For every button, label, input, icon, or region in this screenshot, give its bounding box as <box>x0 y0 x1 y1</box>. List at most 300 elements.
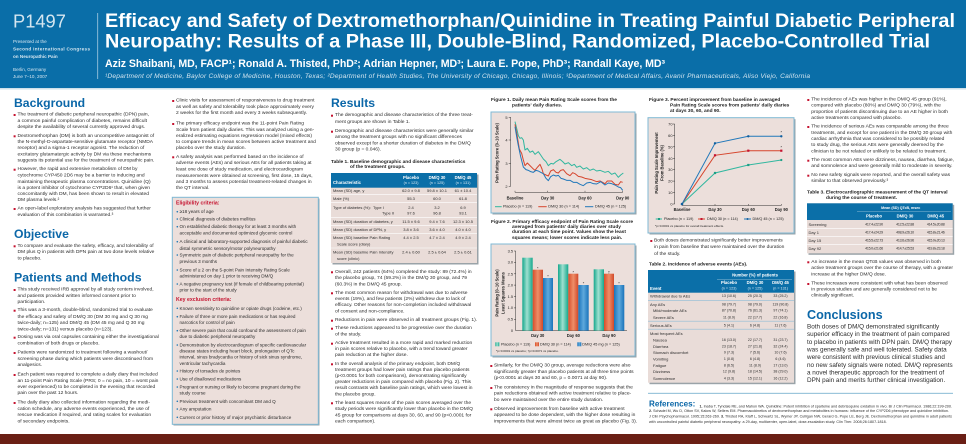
figure 1: line chart of daily pain scores: Pain Rating Score (0–10 Scale) <box>494 122 500 183</box>
table 2: adverse events: Vomiting <box>653 356 668 362</box>
table 2: adverse events: 87 (70.8) <box>722 309 736 313</box>
table 3: QTcB interval: 413.6 ± 26.96 <box>896 239 914 243</box>
table 1: baseline characteristics: score (clinic) <box>337 256 360 261</box>
table 2: adverse events: 11 (8.9) <box>749 363 761 367</box>
text block: objective: to placebo. <box>18 256 42 262</box>
table 1: baseline characteristics: 4.9 ± 2.4 <box>455 235 472 240</box>
reference list: J Clin Psychopharmacol. 1995;15:263-269. 3. Thisted RA, Klaff L, Schwartz SL, Wymer JP, Culligan NW, Gerard G, Pope LE, Berg JE. Dextromethorphan and quinidine in adult patients <box>649 414 952 418</box>
figure 2: bar chart of least squares means: Day 30 <box>531 333 545 338</box>
table 2: adverse events: (n = 131) <box>773 286 788 290</box>
figure 2: bar chart of least squares means: 0 <box>511 328 514 333</box>
table 1: baseline characteristics: 11.5 ± 9.6 <box>402 219 421 224</box>
text block: results intro: among the treatment groups with no significant differences <box>335 134 463 140</box>
figure 1: line chart of daily pain scores: Baseline <box>507 196 524 200</box>
footer bar <box>0 434 966 444</box>
table 2 title: Table 2. Incidence of adverse events (AEs). <box>649 262 747 268</box>
bars: day 90: † <box>608 269 610 274</box>
figure 3: line chart of percent improvement <box>648 118 796 234</box>
table 1: baseline characteristics: 4.0 ± 4.0 <box>455 227 472 232</box>
figure 1 title: patients' daily diaries. <box>512 102 562 108</box>
table 2: adverse events: Event <box>650 286 662 291</box>
table 1: baseline characteristics: 6.9 <box>460 205 467 210</box>
figure 3 title: Pain Rating Scale scores from patients' daily diaries <box>670 102 790 108</box>
legend: DM/Q 30 (n = 114) <box>548 205 580 209</box>
table 2: adverse events: 22 (16.8) <box>773 315 788 319</box>
figure 3 title <box>649 97 790 114</box>
figure 2: bar chart of least squares means: 3.0 <box>508 260 514 264</box>
table 1 title: Table 1. Baseline demographic and disease characteristics <box>331 159 466 165</box>
list: exclusion criteria: Any amputation <box>180 406 212 412</box>
table 1: baseline characteristics: 97.6 <box>407 210 416 216</box>
text block: results findings: Active treatment resulted in a more rapid and marked reduction <box>335 340 472 346</box>
legend: DM/Q 45 (n = 125) <box>595 205 627 209</box>
text block: methods continued: as well as safety and tolerability took place approximately every <box>176 104 315 110</box>
text block: results intro <box>331 112 474 152</box>
figure 3: line chart of percent improvement: 70 <box>668 122 673 126</box>
table 2: adverse events: 25 (20.3) <box>748 294 762 298</box>
text block: safety findings: to study drug, the serious AEs were generally deemed by the <box>811 142 944 148</box>
figure 2 title: averaged from patients' daily diaries over study <box>512 224 621 230</box>
text block: objective: To compare and evaluate the safety, efficacy, and tolerability of <box>18 243 154 249</box>
list: eligibility criteria <box>176 209 308 292</box>
heading: References: References: <box>649 399 695 408</box>
congress details <box>13 39 90 79</box>
footnote: *p<0.0001 vs placebo for overall treatment effects. <box>655 224 724 228</box>
figure 2: bar chart of least squares means <box>491 244 636 358</box>
text block: conclusions: was generally safe and well tolerated. Safety data <box>806 346 947 354</box>
list: exclusion criteria: study course <box>180 390 206 396</box>
figure 2: bar chart of least squares means: Least Squares Means <box>500 271 506 314</box>
text block: background bullets: However, the rapid and extensive metabolism of DM by <box>18 166 138 172</box>
table 1: baseline characteristics: 55.3 <box>407 196 416 201</box>
table 3: QTcB interval: 417.4 ± 24.29 <box>865 231 883 235</box>
text block: patients and methods bullets: combination of both drugs or placebo. <box>18 340 100 346</box>
table 2: adverse events: 9 (7.3) <box>724 351 734 355</box>
text block: patients and methods bullets: rescue medication if required, and rating scales for evaluation <box>18 412 151 418</box>
text block: methods continued: Scale from patient daily diaries. This was analyzed using a gen- <box>176 127 315 133</box>
table 3: QTcB interval: Day 92 <box>808 246 822 251</box>
text block: safety findings: active treatments compared with placebo. <box>811 115 902 121</box>
table 3: QTcB interval: 414.7 ± 25.53 <box>896 247 914 251</box>
table 3 title: during the course of treatment. <box>826 195 897 201</box>
bars: day 60: * <box>583 280 585 286</box>
figure 3: line chart of percent improvement: 50 <box>668 144 673 150</box>
legend: DM/Q 45 mg (n = 125) <box>582 342 620 346</box>
figure 1: line chart of daily pain scores: Day 30 <box>541 196 555 200</box>
table 3: QTcB interval: 414.5 ± 20.88 <box>927 222 945 226</box>
table 2: adverse events: Somnolence <box>653 376 676 381</box>
table 2: adverse events: Dizziness <box>653 369 670 374</box>
figure 3: line chart of percent improvement: Baseline <box>674 207 691 212</box>
text block: figure 2 findings: improvements that were almost twice as great as placebo (Fig. 3). <box>494 418 637 424</box>
poster number: P1497 <box>13 10 66 32</box>
text block: results intro: observed except for a shorter duration of diabetes in the DM/Q <box>335 140 471 146</box>
table 1: baseline characteristics: 3.2 <box>434 205 441 210</box>
figure 2: bar chart of least squares means: 0.5 <box>508 316 513 322</box>
text block: conclusions: to placebo in patients with DPN pain. DM/Q therapy <box>807 339 953 346</box>
table 2: adverse events: 22 (17.7) <box>748 315 762 319</box>
text block: results findings: pain reduction at the higher dose. <box>335 352 408 358</box>
text block: safety findings: and somnolence and were generally mild to moderate in severity. <box>811 163 952 169</box>
list: exclusion criteria: ventricular tachycardia <box>180 361 226 366</box>
list: exclusion criteria: Previous treatment with concomitant DM and Q <box>180 399 276 404</box>
legend <box>656 217 784 221</box>
text block: patients and methods bullets: an 11-point Pain Rating Scale (PRS; 0 = no pain, 10 = worst pain <box>18 378 159 384</box>
figure 1: line chart of daily pain scores <box>491 112 636 214</box>
table 3 title: Table 3. Electrocardiographic measurement of the QT interval <box>807 190 948 196</box>
text block: results intro: The demographic and disease characteristics of the three treat- <box>335 112 473 118</box>
list: exclusion criteria: interval, sinus bradycardia or history of sick sinus syndrome, <box>180 354 302 360</box>
text block: results findings <box>331 269 477 424</box>
table 1 title: of the treatment groups. <box>350 164 405 170</box>
figure 2: bar chart of least squares means: 3.5 <box>508 248 513 254</box>
list: exclusion criteria: History of torsades de pointes <box>180 368 241 374</box>
text block: background bullets: is a potent inhibitor of cytochrome CYP2D6¹ that, when given <box>18 185 150 191</box>
figure 1: line chart of daily pain scores: 5 <box>505 115 508 120</box>
table 1: baseline characteristics: Mean (SD) duration of diabetes, y <box>333 219 393 224</box>
text block: methods continued: adverse events (AEs) and serious AEs for all patients taking at <box>176 160 312 166</box>
text block: safety findings: The incidence of serious AEs was comparable among the three <box>811 124 949 130</box>
bars: day 30 <box>522 258 553 331</box>
heading: Objective: Objective <box>14 227 69 241</box>
table 1: baseline characteristics: 4.4 ± 2.5 <box>403 235 420 240</box>
text block: patients and methods bullets: cation schedule, any adverse events experienced, the use of <box>18 406 150 412</box>
text block: patients and methods bullets: twice-daily; n=125) and DM/Q 45 (DM 45 mg and Q 30 mg <box>18 320 145 326</box>
text block: background bullets: DM plasma levels.² <box>18 197 60 203</box>
legend: DM/Q 30 (n = 114) <box>707 217 739 221</box>
table 1: baseline characteristics <box>331 173 478 264</box>
table 1 title <box>331 159 466 170</box>
congress details: on Neuropathic Pain <box>13 54 58 59</box>
figure 3 title: Figure 3. Percent improvement from baseline in averaged <box>649 97 780 103</box>
figure 1 title: Figure 1. Daily mean Pain Rating Scale scores from the <box>491 97 617 103</box>
congress details: Berlin, Germany <box>13 67 47 72</box>
text block: results findings: in pain scores relative to placebo, with a trend toward greater <box>335 346 468 352</box>
text block: figure 3 findings: of the study. <box>654 251 680 257</box>
text block: figure 2 findings: pain reductions obtained with active treatment relative to place- <box>494 390 632 396</box>
table 1: baseline characteristics: 2.4 <box>408 205 415 210</box>
table 1: baseline characteristics: Placebo <box>403 175 419 180</box>
figure 3: line chart of percent improvement: Day 60 <box>742 207 756 212</box>
text block: background bullets: suggests its potential use for the treatment of neuropathic pain. <box>18 158 154 164</box>
figure 2: bar chart of least squares means: Pain Rating (0–10 Scale) <box>494 269 500 317</box>
reference list: 1. Inaba T, Tyndale RE, and Mahon WA. Quinidine: Potent inhibition of sparteine and debrisoquine oxidation in vivo. Br J Clin Pharmacol. 1986;22:199-200. <box>700 404 952 408</box>
table 1: baseline characteristics: 3.6 ± 4.0 <box>429 227 446 232</box>
text block: patients and methods bullets: the efficacy and safety of DM/Q 30 (DM 30 mg and Q 30 mg <box>18 314 148 320</box>
figure 2: bar chart of least squares means: 2.5 <box>508 272 513 276</box>
table 2: adverse events: Stomach discomfort <box>653 350 689 355</box>
text block: background bullets: the N-methyl-D-aspartate-sensitive glutamate receptor (NMDA <box>18 139 154 145</box>
list: exclusion criteria: due to diabetic peripheral neuropathy <box>180 334 256 339</box>
heading: Results: Results <box>331 96 375 110</box>
text block: QT findings: An increase in the mean QTcB values was observed in both <box>811 259 941 265</box>
text block: background bullets: Dextromethorphan (DM) is both an uncompetitive antagonist of <box>18 133 155 139</box>
text block: patients and methods bullets: This study received IRB approval by all study centers involved, <box>18 286 154 292</box>
table 3: QTcB interval: Placebo <box>866 214 882 218</box>
text block: safety findings <box>807 96 954 184</box>
text block: figure 3 findings: in pain from baseline that were maintained over the duration <box>654 244 785 250</box>
text block: results findings: each comparison). <box>335 418 375 424</box>
table 1: baseline characteristics: Mean (SD) baseline Pain Intensity <box>333 250 393 254</box>
table 1: baseline characteristics: 2.5 ± 0.64 <box>428 250 447 254</box>
footnote: *p<0.0001 vs placebo; †p=0.0071 vs placebo. <box>496 349 559 353</box>
text block: results findings: (60.3%) in the DM/Q 45 group. <box>335 282 402 288</box>
text block: results findings: These reductions appeared to be progressive over the duration <box>335 325 472 331</box>
table 2: adverse events: 16 (12.2) <box>773 376 788 380</box>
table 2: adverse events: 6 (4.8) <box>750 357 760 361</box>
text block: methods continued: to compare trends in mean scores between active treatment and <box>176 139 316 145</box>
text block: safety findings: clinician to be not related or unlikely to be related to treatment. <box>811 148 947 154</box>
table 2: adverse events: DM/Q 45 <box>772 280 790 285</box>
table 2: adverse events: 12 (9.8) <box>723 370 735 374</box>
table 2: adverse events: 16 (13.0) <box>722 338 736 342</box>
text block: QT findings: These increases were consistent with what has been observed <box>811 280 948 286</box>
text block: safety findings: compared with placebo (80%) and DM/Q 30 (79%), with the <box>811 102 941 108</box>
line: placebo <box>682 159 782 204</box>
reference list: 2. Schadel M, Wu D, Otton SV, Kalow W, Sellers EM. Pharmacokinetics of dextromethorphan and metabolites in humans: influence of the CYP2D6 phenotype and quinidine inhibition. <box>649 409 949 413</box>
figure 2: bar chart of least squares means: Day 60 <box>567 333 581 338</box>
table 2: adverse events: 33 (25.2) <box>773 294 788 298</box>
text block: methods continued: and 3 months to assess potential treatment-related changes in <box>176 179 312 185</box>
text block: safety findings: treatments, and except for one patient in the DM/Q 30 group with <box>811 130 953 136</box>
list: exclusion criteria: Failure of three or more pain medications or has required <box>180 314 296 319</box>
reference list: with uncontrolled painful diabetic peripheral neuropathy: a 29-day, multicenter, open-label, dose-escalation study. Clin Ther. 2008;26:1807-1818. <box>649 420 887 424</box>
table 1: baseline characteristics: Scale score (diary) <box>337 242 371 246</box>
figure 1: line chart of daily pain scores: 2 <box>505 184 508 189</box>
figure 2: bar chart of least squares means: 1.0 <box>508 305 514 310</box>
text block: QT findings <box>807 259 953 298</box>
text block: objective <box>14 243 155 262</box>
table 2: adverse events: Most frequent AEs <box>650 331 683 336</box>
table 1: baseline characteristics: 93.1 <box>459 210 468 216</box>
table 2: adverse events: Number (%) of patients <box>732 273 779 278</box>
legend: Placebo (n = 119) <box>503 205 533 209</box>
text block: figure 2 findings: appeared to be dose dependent, with the higher dose resulting in <box>494 412 636 418</box>
figure 1: line chart of daily pain scores: 3 <box>505 161 508 166</box>
line: DM/Q 45 <box>515 127 623 190</box>
table 3: QTcB interval: 415.8 ± 21.46 <box>927 231 945 235</box>
table 1: baseline characteristics: 96.8 <box>433 210 442 216</box>
text block: results findings: the placebo group, 74 (59.2%) in the DM/Q 30 group, and 79 <box>335 275 467 281</box>
table 2: adverse events: Fatigue <box>653 363 667 368</box>
table 3: QTcB interval: Day 1 <box>808 230 820 235</box>
text block: figure 2 findings: Similarly, for the DM/Q 30 group, average reductions were also <box>494 362 631 368</box>
table 2: adverse events: 6 (4.6) <box>775 357 786 361</box>
figure 3: line chart of percent improvement: From Baseline (%) <box>660 145 664 181</box>
text block: conclusions <box>806 324 953 384</box>
text block: background bullets: excitatory glutamatergic activity by DM via these mechanisms <box>18 152 152 158</box>
text block: patients and methods bullets: screening phase during which patients were discontinued from <box>18 356 153 362</box>
legend: Placebo (n = 119) <box>501 342 531 346</box>
figure 2: bar chart of least squares means: 2.0 <box>508 282 514 288</box>
text block: patients and methods bullets: twice-daily; n=131) versus placebo (n=123). <box>18 326 113 332</box>
table 2: adverse events: 11 (8.9) <box>723 315 735 319</box>
heading: Background: Background <box>14 96 85 110</box>
table 1: baseline characteristics: (n = 131) <box>456 181 470 185</box>
list: eligibility criteria: ≥18 years of age <box>180 209 214 214</box>
table 3: QTcB interval: 415.9 ± 20.13 <box>927 239 945 243</box>
reference list <box>649 404 952 424</box>
text block: figure 2 findings <box>490 362 637 424</box>
table 1: baseline characteristics: 2.4 ± 0.60 <box>402 250 421 254</box>
text block: conclusions: a novel therapeutic approach for the treatment of <box>807 370 944 376</box>
table 1: baseline characteristics: Characteristic <box>333 180 362 185</box>
legend: Placebo (n = 119) <box>664 217 694 221</box>
figure 3: line chart of percent improvement: Day 30 <box>708 207 722 212</box>
text block: QT findings: active treatment groups over the course of therapy, with a greater <box>811 265 953 271</box>
text block: results intro: ment groups are shown in Table 1. <box>335 119 410 125</box>
table 1: baseline characteristics: Mean (SD) age, y <box>333 188 364 193</box>
list: eligibility criteria: A clinical and laboratory-supported diagnosis of painful diabetic <box>180 239 308 244</box>
table 2: adverse events: 7 (5.6) <box>750 351 760 355</box>
authors: Aziz Shaibani, MD, FACP¹; Ronald A. Thisted, PhD²; Adrian Hepner, MD³; Laura E. Pope, PhD³; Randall Kaye, MD³ <box>105 58 665 70</box>
text block: safety findings: proportion of patients discontinuing due to an AE higher in both <box>811 109 948 115</box>
text block: conclusions: DPN pain and merits further clinical investigation. <box>807 377 945 384</box>
text block: methods continued: the QT interval. <box>176 185 209 191</box>
text block: figure 2 findings: bo were maintained over the entire study duration. <box>494 397 603 403</box>
figure 3: line chart of percent improvement: 40 <box>668 156 673 161</box>
text block: figure 2 findings: The consistency in the magnitude of response suggests that the <box>494 384 633 390</box>
heading: key exclusion criteria: Key exclusion criteria: <box>176 297 232 303</box>
table 2: adverse events: 97 (74.1) <box>773 309 788 313</box>
figure 3 title: at days 30, 60, and 90. <box>670 108 721 114</box>
list: eligibility criteria: administered on day 1 prior to receiving DM/Q <box>180 274 274 278</box>
text block: results intro: 30 group (p = 0.046). <box>335 146 381 152</box>
list: exclusion criteria <box>176 306 307 420</box>
text block: patients and methods bullets: and patients provided written informed consent prior to <box>18 293 136 299</box>
text block: patients and methods bullets: The daily diary also collected information regarding the medi- <box>18 400 150 406</box>
text block: methods continued: eralized estimating equations regression model (mixed effects) <box>176 133 312 139</box>
table 3: QTcB interval: 419.8 ± 23.18 <box>927 247 945 251</box>
table 1: baseline characteristics: Type of diabetes (%): Type I <box>333 205 384 210</box>
table 2: adverse events: Diarrhea <box>653 344 669 349</box>
table 2: adverse events: (n = 123) <box>722 286 736 290</box>
table 2: adverse events: 13 (10.6) <box>722 294 736 298</box>
table 3: QTcB interval: Screening <box>808 222 827 227</box>
list: eligibility criteria: Clinical diagnosis of diabetes mellitus <box>180 216 256 222</box>
legend <box>495 205 627 209</box>
text block: results findings: of the study. <box>335 332 361 338</box>
text block: results findings: Overall, 242 patients (64%) completed the study: 89 (72.4%) in <box>335 269 472 275</box>
table 2: adverse events: 76 (61.3) <box>748 309 762 313</box>
figure 1 title <box>491 97 617 108</box>
list: eligibility criteria: acceptable and documented optimized glycemic control <box>180 230 292 236</box>
text block: methods continued: placebo over the study duration. <box>176 145 246 151</box>
text block: results findings: study periods were significantly lower than placebo in the DM/Q <box>335 406 473 412</box>
text block: patients and methods bullets: Each patient was required to complete a daily diary that included <box>18 372 158 378</box>
text block: patients and methods bullets <box>14 286 159 424</box>
table 2: adverse events: 23 (18.7) <box>722 344 736 348</box>
text block: results findings: result contrasts with baseline pain ratings, which were lowest in <box>335 385 473 391</box>
title <box>105 10 955 52</box>
text block: results findings: efficacy. Other reasons for non-completion included withdrawal <box>335 302 471 308</box>
list: eligibility criteria: distal symmetric sensory/motor polyneuropathy <box>180 246 276 251</box>
text block: background bullets: receptor) and a sigma-1 receptor agonist. The reduction of <box>18 145 145 151</box>
table 2: adverse events: 98 (79.0) <box>748 302 762 306</box>
bars: day 30: * <box>547 274 549 278</box>
table 1: baseline characteristics: Mean (SD) baseline Pain Rating <box>333 235 390 240</box>
congress details: Second International Congress <box>13 46 90 52</box>
text block: safety findings: The most common AEs were dizziness, nausea, diarrhea, fatigue, <box>811 157 954 163</box>
figure 2 title: squares means; lower scores indicate less pain. <box>512 235 622 241</box>
table 2: adverse events: DM/Q 30 <box>747 280 764 285</box>
list: exclusion criteria: Demonstration by electrocardiogram of specific cardiovascular <box>180 342 307 348</box>
table 3: QTcB interval: 415.0 ± 21.66 <box>865 247 883 251</box>
list: exclusion criteria: Other severe pain that could confound the assessment of pain <box>180 328 306 333</box>
table 1: baseline characteristics: Type II <box>382 210 394 216</box>
line: DM/Q 30 <box>682 150 782 204</box>
table 2: adverse events: 6 (4.8) <box>750 323 760 327</box>
references <box>648 393 953 424</box>
text block: methods continued <box>172 98 316 191</box>
table 3: QTcB interval: 417.4 ± 22.90 <box>865 222 883 226</box>
text block: methods continued: measurements were obtained at screening, first dose, 15 days, <box>176 173 313 179</box>
table 1: baseline characteristics: Male (%) <box>333 196 350 201</box>
table 2: adverse events: 38 (29.0) <box>773 370 788 374</box>
text block: patients and methods bullets: This was a 3-month, double-blind, randomized trial to evaluate <box>18 307 153 313</box>
table 3: QTcB interval: Mean (SD) QTcB, msec <box>881 206 920 210</box>
heading: eligibility criteria: Eligibility criteria: <box>176 200 220 206</box>
text block: results findings: greater reductions in pain compared with placebo (Fig. 2). This <box>335 379 472 385</box>
text block: background bullets: evaluation of this combination is warranted.³ <box>18 212 114 218</box>
table 3: QTcB interval: 412.5 ± 22.88 <box>896 222 914 226</box>
table 1: baseline characteristics: 3.8 ± 3.6 <box>403 227 420 232</box>
table 1: baseline characteristics: DM/Q 30 <box>429 175 446 180</box>
congress details: June 7–10, 2007 <box>13 74 48 79</box>
text block: patients and methods bullets: Dosing was via oral capsules containing either the investigational <box>18 334 159 340</box>
table 1: baseline characteristics: Mean (SD) duration of DPN, y <box>333 227 386 232</box>
line: placebo <box>515 122 623 177</box>
text block: results findings: Reductions in pain were observed in all treatment groups (Fig. 1). <box>335 317 477 323</box>
list: eligibility criteria: Symmetric pain of diabetic peripheral neuropathy for the <box>180 252 294 258</box>
table 3: QTcB interval: Day 15 <box>808 238 822 243</box>
text block: figure 2 findings: (p<0.0001 at days 30 and 60, p = 0.0071 at day 90). <box>494 375 607 381</box>
header banner <box>0 0 966 90</box>
table 2: adverse events: (n = 125) <box>748 286 762 290</box>
text block: results findings: The most common reason for withdrawal was due to adverse <box>335 290 468 296</box>
table 3: QTcB interval: 408.9 ± 26.10 <box>896 231 914 235</box>
table 2: adverse events: 31 (23.7) <box>773 338 788 342</box>
figure 2 title: Figure 2. Primary efficacy endpoint of Pain Rating Scale score <box>491 219 633 225</box>
table 1: baseline characteristics: 59.8 ± 10.1 <box>427 188 448 193</box>
table 1: baseline characteristics: (n = 123) <box>404 181 418 185</box>
bars: day 90 <box>594 269 624 331</box>
table 1: baseline characteristics: 4.7 ± 2.4 <box>429 235 446 240</box>
text block: background bullets: concomitantly with DM, has been shown to result in elevated <box>18 191 149 197</box>
legend: DM/Q 45 (n = 125) <box>752 217 784 221</box>
figure 1: line chart of daily pain scores: 4 <box>505 138 508 142</box>
text block: background bullets <box>14 112 155 218</box>
table 1: baseline characteristics: (n = 125) <box>430 181 444 185</box>
table 2: adverse events: 32 (24.4) <box>773 344 788 348</box>
figure 3: line chart of percent improvement: 20 <box>668 178 673 184</box>
text block: safety findings: cardiac arrhythmia that was considered to be possibly related <box>811 136 945 142</box>
table 1: baseline characteristics: 62.0 ± 9.8 <box>402 188 421 193</box>
table 2: adverse events: Placebo <box>721 280 737 285</box>
list: eligibility criteria: Score of ≥ 2 on the 5-point Pain Intensity Rating Scale <box>180 268 290 272</box>
table 2: adverse events: 11 (7.6) <box>775 323 786 327</box>
figure 2: bar chart of least squares means: 1.5 <box>508 294 513 299</box>
bars: day 30: * <box>537 265 539 270</box>
text block: figure 3 findings: Both doses demonstrated significantly better improvements <box>654 238 783 244</box>
title: Efficacy and Safety of Dextromethorphan/Quinidine in Treating Painful Diabetic Peripheral <box>105 10 955 32</box>
text block: safety findings: The incidence of AEs was higher in the DM/Q 45 group (91%), <box>811 96 947 102</box>
text block: conclusions: superior efficacy in the treatment of pain compared <box>807 331 950 338</box>
text block: results findings: events (19%), and few patients (2%) withdrew due to lack of <box>335 296 466 302</box>
list: exclusion criteria: narcotics for control of pain <box>180 320 235 325</box>
list: eligibility criteria: prior to the start of the study <box>180 288 237 292</box>
figure 3: line chart of percent improvement: 30 <box>668 167 673 172</box>
